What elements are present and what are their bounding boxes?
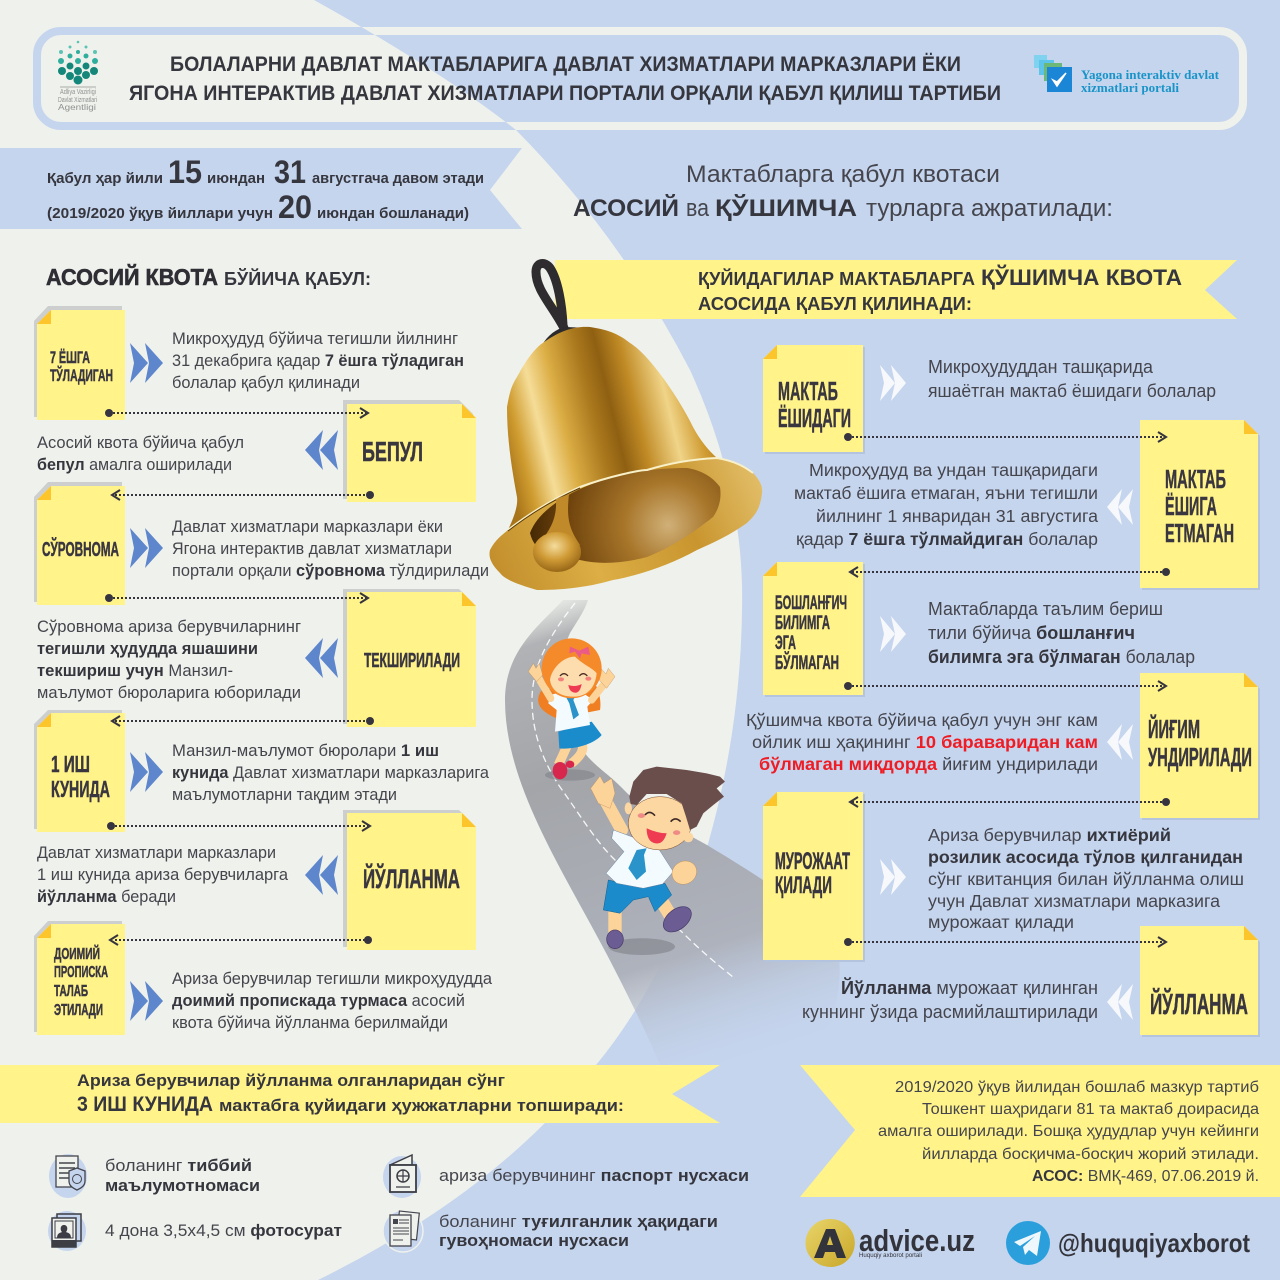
right text 5: розилик асосида тўлов қилганидан — [928, 847, 1243, 867]
left text 1: болалар қабул қилинади — [172, 373, 360, 392]
ribbon: additional quota: ҚУЙИДАГИЛАР МАКТАБЛАРГА — [698, 268, 975, 289]
right sticker 5: мурожаат қилади: ҚИЛАДИ — [775, 872, 832, 899]
right text 3 — [928, 599, 1195, 667]
left text 6: йўлланма беради — [37, 887, 176, 906]
left text 3 — [172, 517, 489, 580]
icon: birth certificate — [383, 1210, 423, 1252]
right arrow 3 — [880, 616, 906, 652]
left arrow 3 — [130, 528, 163, 568]
left sticker 5: 1 иш кунида — [34, 710, 125, 832]
icon: medical certificate — [49, 1154, 87, 1198]
intro heading: ва — [686, 195, 710, 222]
right text 5: сўнг квитанция билан йўлланма олиш — [928, 869, 1244, 889]
right sticker 3: бошланғич билимга эга бўлмаган: БИЛИМГА — [775, 613, 830, 634]
ribbon: documents heading: 3 ИШ КУНИДА — [77, 1093, 213, 1116]
date ribbon: июндан — [207, 170, 265, 187]
logo: interactive portal: Yagona interaktiv davlat — [1081, 67, 1220, 82]
ribbon: note: йилларда босқичма-босқич жорий этилади. — [922, 1146, 1259, 1163]
connector: йиғим to мурожаат — [850, 797, 1170, 807]
logo: interactive portal: xizmatlari portali — [1081, 80, 1179, 95]
logo: interactive portal — [1034, 55, 1220, 95]
right sticker 2: мактаб ёшига етмаган: МАКТАБ — [1165, 464, 1226, 494]
logo: telegram — [1006, 1221, 1250, 1265]
right sticker 3: бошланғич билимга эга бўлмаган: ЭГА — [775, 633, 796, 654]
connector: бошланғич to йиғим — [844, 681, 1166, 691]
left sticker 1: 7 ёшга тўладиган: ТЎЛАДИГАН — [50, 365, 113, 385]
date ribbon: Қабул ҳар йили — [47, 170, 163, 187]
left text 3: Давлат хизматлари марказлари ёки — [172, 517, 443, 536]
left sticker 2: бепул — [343, 400, 476, 502]
title: ЯГОНА ИНТЕРАКТИВ ДАВЛАТ ХИЗМАТЛАРИ ПОРТАЛИ ОРҚАЛИ ҚАБУЛ ҚИЛИШ ТАРТИБИ — [129, 82, 1001, 105]
right text 4: бўлмаган миқдорда йиғим ундирилади — [759, 754, 1098, 774]
right text 6: куннинг ўзида расмийлаштирилади — [802, 1002, 1098, 1022]
connector: етмаган to бошланғич — [850, 567, 1170, 577]
right text 2: Микроҳудуд ва ундан ташқаридаги — [809, 460, 1098, 480]
logo: Adliya Vazirligi agency — [58, 41, 98, 112]
right sticker 5: мурожаат қилади: МУРОЖААТ — [775, 848, 850, 875]
date ribbon: июндан бошланади) — [317, 205, 469, 222]
ribbon: note: АСОС: ВМҚ-469, 07.06.2019 й. — [1032, 1168, 1259, 1185]
connector: йўлланма to доимий прописка — [110, 935, 372, 945]
date ribbon: августгача давом этади — [312, 170, 484, 187]
date ribbon: (2019/2020 ўқув йиллари учун — [47, 205, 273, 222]
left sticker 6: йўлланма: ЙЎЛЛАНМА — [363, 862, 460, 894]
left arrow 2 — [305, 430, 338, 470]
logo: advice.uz: advice.uz — [859, 1223, 975, 1258]
connector: бепул to сўровнома — [112, 490, 374, 500]
right text 2: мактаб ёшига етмаган, яъни тегишли — [794, 483, 1098, 503]
ribbon: note — [800, 1065, 1280, 1197]
left arrow 6 — [305, 855, 338, 895]
title: БОЛАЛАРНИ ДАВЛАТ МАКТАБЛАРИГА ДАВЛАТ ХИЗМАТЛАРИ МАРКАЗЛАРИ ЁКИ — [170, 53, 961, 76]
heading: main quota — [46, 263, 371, 290]
road — [505, 600, 840, 1090]
left sticker 7: доимий прописка: ПРОПИСКА — [54, 964, 108, 981]
connector: 7 ёшга to бепул — [105, 408, 368, 418]
left text 5: Манзил-маълумот бюролари 1 иш — [172, 741, 439, 760]
right text 5: Ариза берувчилар ихтиёрий — [928, 825, 1171, 845]
left text 6: 1 иш кунида ариза берувчиларга — [37, 865, 289, 884]
left sticker 7: доимий прописка: ТАЛАБ — [54, 983, 88, 1000]
right text 1 — [928, 357, 1216, 401]
right sticker 6: йўлланма — [1140, 926, 1260, 1037]
left arrow 5 — [130, 752, 163, 792]
left text 4: текшириш учун Манзил- — [37, 661, 233, 680]
left sticker 1: 7 ёшга тўладиган: 7 ЁШГА — [50, 348, 90, 367]
connector: текширилади to 1 иш кунида — [112, 716, 374, 726]
left text 7 — [172, 969, 493, 1032]
left text 3: портали орқали сўровнома тўлдирилади — [172, 561, 489, 580]
ribbon: documents heading — [0, 1065, 720, 1123]
text: medical certificate — [105, 1156, 260, 1195]
left text 4: маълумот бюроларига юборилади — [37, 683, 301, 702]
left text 4: Сўровнома ариза берувчиларнинг — [37, 617, 301, 636]
left arrow 7 — [130, 981, 163, 1021]
logo: telegram: @huquqiyaxborot — [1058, 1228, 1250, 1258]
logo: Adliya Vazirligi agency: Agentligi — [58, 103, 96, 112]
right text 6: Йўлланма мурожаат қилинган — [841, 977, 1098, 998]
intro heading: турларга ажратилади: — [866, 195, 1113, 222]
left text 1: Микроҳудуд бўйича тегишли йилнинг — [172, 329, 458, 348]
left text 5: маълумотларни тақдим этади — [172, 785, 397, 804]
right text 3: Мактабларда таълим бериш — [928, 599, 1163, 619]
date ribbon: 31 — [274, 154, 306, 190]
text: passport: ариза берувчининг паспорт нусхаси — [439, 1166, 749, 1185]
connector: 1 иш кунида to йўлланма — [107, 821, 370, 831]
logo: Adliya Vazirligi agency: Adliya Vazirligi — [60, 89, 96, 96]
right text 1: Микроҳудуддан ташқарида — [928, 357, 1154, 377]
right text 3: билимга эга бўлмаган болалар — [928, 647, 1195, 667]
left text 4 — [37, 617, 301, 702]
right sticker 2: мактаб ёшига етмаган — [1140, 420, 1260, 590]
intro heading: Мактабларга қабул квотаси — [686, 161, 1000, 188]
icon: passport — [383, 1155, 421, 1198]
right sticker 3: бошланғич билимга эга бўлмаган — [763, 562, 865, 697]
logo: advice.uz — [805, 1219, 975, 1267]
date ribbon: 20 — [278, 189, 312, 225]
left arrow 4 — [305, 638, 338, 678]
right text 3: тили бўйича бошланғич — [928, 623, 1135, 643]
right sticker 1: мактаб ёшидаги — [763, 345, 865, 454]
left sticker 5: 1 иш кунида: 1 ИШ — [51, 751, 90, 777]
right sticker 5: мурожаат қилади — [763, 792, 865, 962]
logo: Adliya Vazirligi agency: Davlat Xizmatlari — [58, 97, 97, 104]
text: birth certificate: боланинг туғилганлик ҳақидаги — [439, 1212, 718, 1231]
left text 2: бепул амалга оширилади — [37, 455, 232, 474]
left text 1 — [172, 329, 464, 392]
right arrow 2 — [1107, 489, 1133, 525]
left text 5: кунида Давлат хизматлари марказларига — [172, 763, 490, 782]
left sticker 4: текширилади: ТЕКШИРИЛАДИ — [364, 650, 460, 672]
logo: advice.uz: Huquqiy axborot portali — [859, 1253, 922, 1259]
right arrow 6 — [1107, 984, 1133, 1020]
connector: мактаб ёшидаги to етмаган — [844, 432, 1166, 442]
left sticker 1: 7 ёшга тўладиган — [34, 306, 125, 420]
left sticker 7: доимий прописка: ЭТИЛАДИ — [54, 1002, 103, 1019]
ribbon: documents heading: Ариза берувчилар йўлланма олганларидан сўнг — [77, 1071, 505, 1090]
right sticker 3: бошланғич билимга эга бўлмаган: БОШЛАНҒИЧ — [775, 593, 847, 614]
ribbon: note: 2019/2020 ўқув йилидан бошлаб мазкур тартиб — [895, 1079, 1259, 1096]
left text 2: Асосий квота бўйича қабул — [37, 433, 244, 452]
left text 2 — [37, 433, 244, 474]
date ribbon — [0, 148, 522, 229]
right sticker 2: мактаб ёшига етмаган: ЁШИГА — [1165, 491, 1217, 521]
right text 4: Қўшимча квота бўйича қабул учун энг кам — [746, 710, 1098, 730]
left sticker 3: сўровнома: СЎРОВНОМА — [42, 537, 119, 561]
connector: сўровнома to текширилади — [105, 593, 368, 603]
left text 7: Ариза берувчилар тегишли микроҳудудда — [172, 969, 493, 988]
right text 4 — [746, 710, 1098, 774]
right sticker 1: мактаб ёшидаги: МАКТАБ — [778, 376, 838, 406]
left text 7: доимий пропискада турмаса асосий — [172, 991, 465, 1010]
ribbon: additional quota — [555, 260, 1237, 319]
left text 5 — [172, 741, 490, 804]
right arrow 4 — [1107, 724, 1133, 760]
text: birth certificate — [439, 1212, 718, 1250]
left text 1: 31 декабрига қадар 7 ёшга тўладиган — [172, 351, 464, 370]
right sticker 4: йиғим ундирилади — [1140, 673, 1260, 820]
intro heading — [573, 161, 1113, 222]
left sticker 5: 1 иш кунида: КУНИДА — [51, 776, 110, 802]
left sticker 7: доимий прописка: ДОИМИЙ — [54, 944, 100, 963]
right sticker 3: бошланғич билимга эга бўлмаган: БЎЛМАГАН — [775, 652, 839, 674]
text: medical certificate: боланинг тиббий — [105, 1156, 252, 1175]
left text 6: Давлат хизматлари марказлари — [37, 843, 276, 862]
right arrow 1 — [880, 365, 906, 401]
text: birth certificate: гувоҳномаси нусхаси — [439, 1231, 629, 1250]
date ribbon: 15 — [168, 154, 202, 190]
ribbon: note: амалга оширилади. Бошқа ҳудудлар учун кейинги — [878, 1123, 1259, 1140]
left arrow 1 — [130, 343, 163, 383]
left text 4: тегишли ҳудудда яшашини — [37, 639, 258, 658]
left sticker 4: текширилади — [343, 589, 476, 727]
left text 3: Ягона интерактив давлат хизматлари — [172, 539, 452, 558]
intro heading: ҚЎШИМЧА — [715, 194, 857, 222]
header frame — [37, 31, 1243, 126]
left sticker 3: сўровнома — [34, 482, 125, 605]
right text 4: ойлик иш ҳақининг 10 бараваридан кам — [752, 732, 1098, 752]
right text 2 — [794, 460, 1098, 549]
ribbon: additional quota: ҚЎШИМЧА КВОТА — [981, 264, 1182, 290]
intro heading: АСОСИЙ — [573, 194, 679, 222]
left sticker 2: бепул: БЕПУЛ — [362, 436, 423, 467]
illustration: boy — [591, 767, 725, 955]
right text 2: қадар 7 ёшга тўлмайдиган болалар — [796, 529, 1098, 549]
left text 7: квота бўйича йўлланма берилмайди — [172, 1013, 448, 1032]
heading: main quota: БЎЙИЧА ҚАБУЛ: — [224, 268, 371, 289]
heading: main quota: АСОСИЙ КВОТА — [46, 263, 218, 290]
right text 1: яшаётган мактаб ёшидаги болалар — [928, 381, 1216, 401]
right sticker 1: мактаб ёшидаги: ЁШИДАГИ — [778, 403, 851, 433]
right sticker 4: йиғим ундирилади: ЙИҒИМ — [1148, 714, 1200, 744]
illustration: girl — [528, 638, 615, 781]
text: medical certificate: маълумотномаси — [105, 1176, 260, 1195]
right text 5: мурожаат қилади — [928, 912, 1074, 932]
right text 5: учун Давлат хизматлари марказига — [928, 891, 1220, 911]
right arrow 5 — [880, 859, 906, 895]
ribbon: note: Тошкент шаҳридаги 81 та мактаб доирасида — [922, 1101, 1259, 1118]
connector: мурожаат to йўлланма — [844, 937, 1166, 947]
left sticker 6: йўлланма — [343, 810, 476, 950]
right text 2: йилнинг 1 январидан 31 августига — [816, 506, 1098, 526]
text: photo: 4 дона 3,5х4,5 см фотосурат — [105, 1221, 342, 1240]
right text 5 — [928, 825, 1244, 932]
ribbon: additional quota: АСОСИДА ҚАБУЛ ҚИЛИНАДИ: — [698, 294, 972, 314]
left text 6 — [37, 843, 289, 906]
right text 6 — [802, 977, 1098, 1022]
left sticker 7: доимий прописка — [34, 921, 125, 1035]
ribbon: documents heading: мактабга қуйидаги ҳужжатларни топширади: — [219, 1096, 624, 1115]
icon: photo — [48, 1211, 86, 1251]
illustration: school bell — [489, 263, 762, 590]
title — [129, 53, 1001, 105]
